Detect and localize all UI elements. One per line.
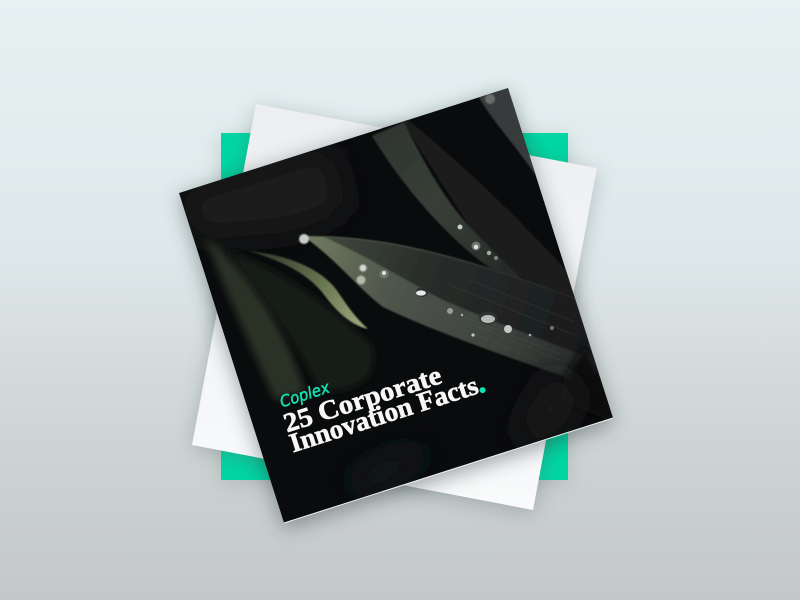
photo: water droplets [299,94,554,337]
bright edge of cover [284,418,613,523]
cover shadow [179,92,613,529]
photo: leaf fibre lines [437,280,575,362]
green square [221,133,568,484]
photo: rear striped blade [403,116,582,310]
title: 25 Corporate [280,360,445,438]
photo: dark leaf body [225,250,374,391]
photo: top right leaf [478,88,536,177]
photo: main leaf [307,235,613,418]
title: Innovation Facts. [286,368,488,458]
photo: rear pale blade [372,122,522,279]
brand name: Coplex [277,378,332,411]
photo: soft top-left shade [170,145,350,240]
cover photo [170,86,630,523]
photo: small olive leaf [248,251,368,329]
white sheet [192,104,597,514]
photo: lower blurred foliage [368,365,574,483]
photo: left blade [205,238,305,400]
